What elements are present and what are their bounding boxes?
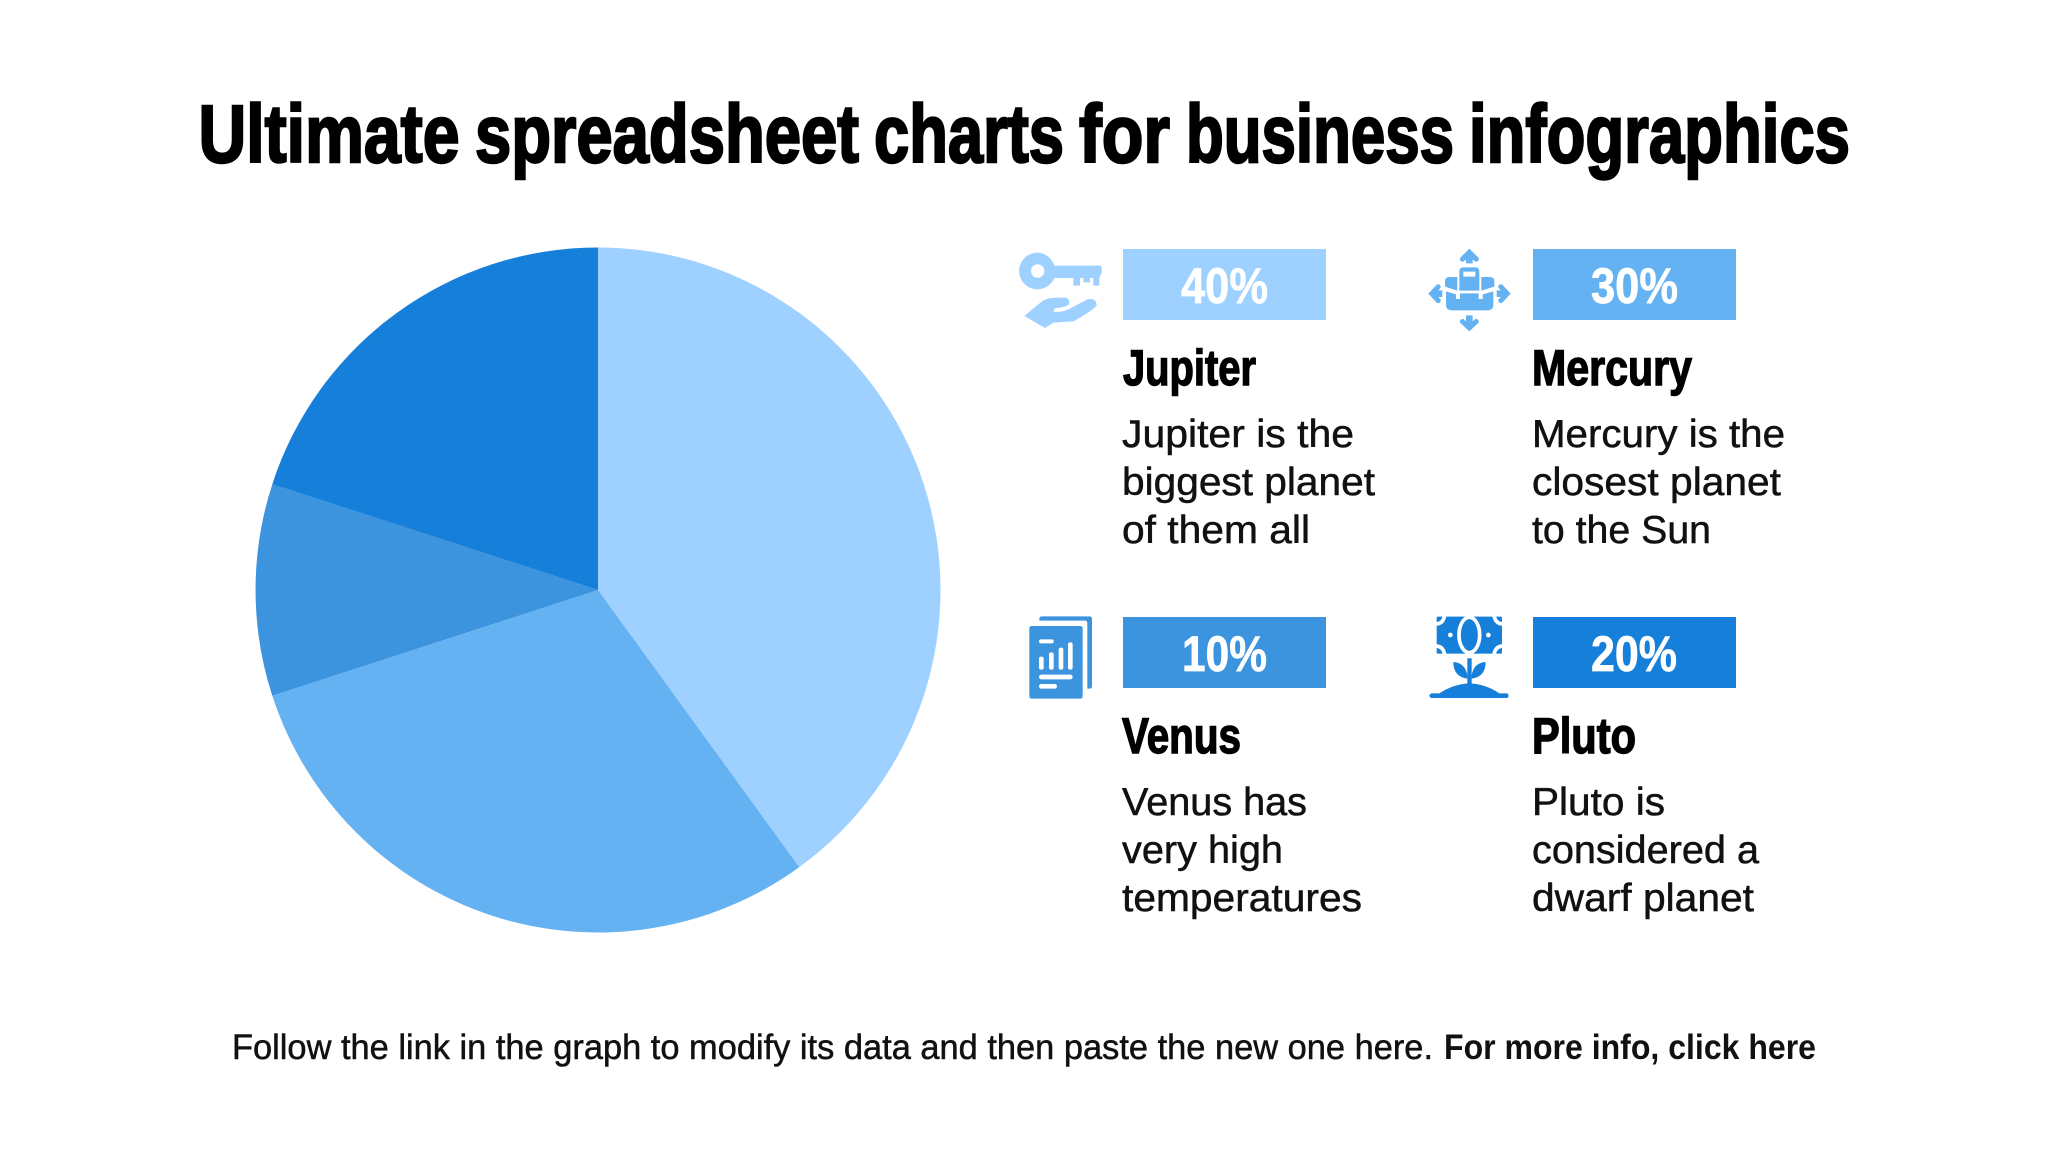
description: Venus: temperatures (1122, 877, 1362, 920)
percentage badge 40% (1123, 249, 1326, 320)
title: for (1079, 89, 1170, 180)
heading: Venus: Venus (1122, 708, 1241, 764)
description: Jupiter: of them all (1122, 509, 1310, 552)
footer note: Follow the link in the graph to modify its data and then paste the new one here. (232, 1028, 1433, 1067)
percentage badge 30% (1533, 249, 1736, 320)
panel: Venus (1029, 616, 1362, 920)
description: Pluto: considered a (1532, 829, 1759, 872)
slice: Mercury 30% (272, 590, 799, 932)
description: Venus: Venus has (1122, 781, 1307, 824)
description: Pluto (1532, 781, 1759, 920)
title: charts (874, 89, 1064, 180)
slice: Venus 10% (256, 484, 598, 696)
icon: key in hand (1019, 253, 1102, 328)
panel: Pluto (1429, 615, 1759, 920)
description: Jupiter: Jupiter is the (1122, 413, 1354, 456)
description: Pluto: dwarf planet (1532, 877, 1754, 920)
footer note: For more info, click here (1444, 1028, 1816, 1067)
pie chart (256, 248, 940, 932)
heading: Pluto: Pluto (1532, 708, 1636, 764)
percentage badge 20%: 20% (1591, 626, 1677, 682)
percentage badge 10% (1123, 617, 1326, 688)
icon: money plant (1429, 615, 1509, 698)
title: business (1186, 89, 1454, 180)
description: Venus (1122, 781, 1362, 920)
description: Mercury: to the Sun (1532, 509, 1711, 552)
slice: Jupiter 40% (598, 248, 940, 867)
icon: briefcase with arrows (1428, 249, 1511, 331)
percentage badge 10%: 10% (1182, 626, 1267, 682)
title (198, 89, 1850, 180)
title: spreadsheet (475, 89, 859, 180)
description: Mercury: Mercury is the (1532, 413, 1785, 456)
panel: Mercury (1428, 249, 1785, 552)
percentage badge 40%: 40% (1181, 258, 1268, 314)
description: Mercury (1532, 413, 1785, 552)
heading: Mercury: Mercury (1532, 340, 1692, 396)
title: Ultimate (198, 89, 460, 180)
percentage badge 20% (1533, 617, 1736, 688)
slice: Pluto 20% (272, 248, 598, 590)
panel: Jupiter (1019, 249, 1375, 552)
description: Jupiter (1122, 413, 1375, 552)
description: Venus: very high (1122, 829, 1283, 872)
description: Jupiter: biggest planet (1122, 461, 1375, 504)
percentage badge 30%: 30% (1591, 258, 1678, 314)
description: Mercury: closest planet (1532, 461, 1781, 504)
icon: chart documents (1029, 616, 1092, 699)
title: infographics (1469, 89, 1850, 180)
heading: Jupiter: Jupiter (1123, 340, 1256, 396)
description: Pluto: Pluto is (1532, 781, 1665, 824)
